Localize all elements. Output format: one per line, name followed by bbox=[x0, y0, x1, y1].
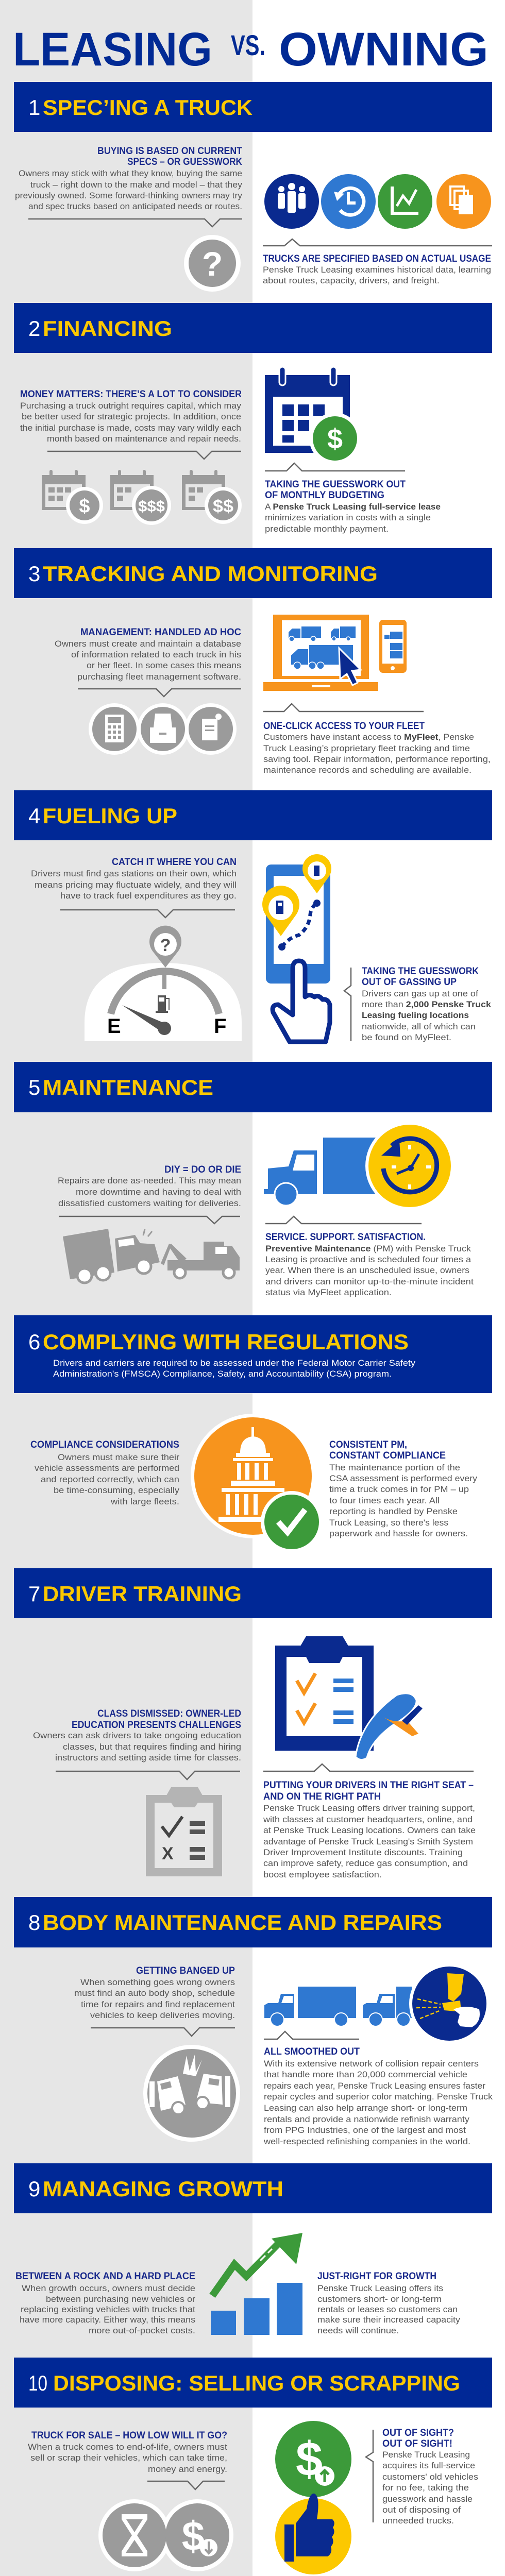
section 4: fueling up bbox=[14, 790, 492, 1042]
leasing text: right seat right path: advantage of Penske Truck Leasing's Smith System bbox=[263, 1837, 473, 1846]
icon: fuel gauge: F bbox=[214, 1015, 226, 1038]
leasing text: service support satisfaction bbox=[265, 1232, 474, 1297]
owning text: ad hoc management: Owners must create and maintain a database bbox=[55, 639, 241, 649]
leasing text: actual usage: about routes, capacity, drivers, and freight. bbox=[263, 276, 440, 285]
owning text: getting banged up: When something goes wrong owners bbox=[80, 1977, 235, 1987]
owning text: truck for sale: sell or scrap their vehicles, which can take time, bbox=[30, 2453, 227, 2463]
leasing text: all smoothed out: Leasing can also help arrange short- or long-term bbox=[264, 2103, 467, 2113]
icon: gray clipboard with check and x: X bbox=[162, 1844, 174, 1863]
leasing text: guesswork out of gassing up: more than 2,000 Penske Truck bbox=[362, 999, 492, 1009]
owning text: rock and hard place bbox=[15, 2271, 195, 2335]
leasing text: one-click access: Truck Leasing’s proprietary fleet tracking and time bbox=[263, 743, 470, 753]
bar 8: BODY MAINTENANCE AND REPAIRS bbox=[43, 1910, 442, 1935]
leasing text: all smoothed out: from PPG Industries, one of the largest and most bbox=[264, 2125, 466, 2135]
leasing text: monthly budgeting: minimizes variation in costs with a single bbox=[265, 513, 431, 522]
section 10: disposing bbox=[14, 2358, 492, 2574]
leasing text: service support satisfaction: Leasing is proactive and is scheduled four times a bbox=[265, 1255, 472, 1264]
leasing text: actual usage bbox=[263, 253, 491, 285]
owning text: DIY bbox=[58, 1164, 241, 1208]
owning text: DIY: DIY = DO OR DIE bbox=[164, 1164, 241, 1175]
leasing text: right seat right path: boost employee satisfaction. bbox=[263, 1870, 382, 1879]
owning text: rock and hard place: have more capacity. Either way, this means bbox=[20, 2315, 195, 2325]
icons: three gray calendars with coins: $ bbox=[79, 496, 90, 517]
owning text: money matters: MONEY MATTERS: THERE’S A LOT TO CONSIDER bbox=[20, 389, 242, 400]
leasing text: all smoothed out: well-respected refinishing companies in the world. bbox=[263, 2137, 470, 2146]
owning text: ad hoc management: or her fleet. In some cases this means bbox=[87, 660, 241, 670]
owning text: class dismissed: classes, but that requires finding and hiring bbox=[63, 1742, 241, 1752]
leasing text: one-click access: saving tool. Repair information, performance reporting, bbox=[263, 754, 491, 764]
leasing text: right seat right path: Penske Truck Leasing offers driver training support, bbox=[263, 1803, 475, 1813]
owning text: compliance considerations: and reported correctly, which can bbox=[41, 1475, 179, 1484]
owning text: catch it where you can: means pricing may fluctuate widely, and they will bbox=[35, 880, 237, 890]
owning text: compliance considerations: COMPLIANCE CONSIDERATIONS bbox=[30, 1439, 179, 1450]
leasing text: guesswork out of gassing up: Drivers can gas up at one of bbox=[362, 989, 478, 998]
owning text: rock and hard place: more out-of-pocket costs. bbox=[89, 2326, 195, 2335]
leasing text: monthly budgeting: OF MONTHLY BUDGETING bbox=[265, 490, 384, 501]
owning text: buying based on guesswork: SPECS – OR GUESSWORK bbox=[127, 157, 242, 167]
icons: calculator, file drawer, document bbox=[89, 703, 237, 755]
owning text: compliance considerations: with large fleets. bbox=[110, 1497, 179, 1506]
icon: fuel gauge: E bbox=[107, 1015, 121, 1038]
owning text: compliance considerations: be time-consuming, especially bbox=[54, 1485, 180, 1495]
bar 5 bbox=[14, 1062, 492, 1112]
bar 6 with intro bbox=[14, 1315, 492, 1393]
owning text: truck for sale: TRUCK FOR SALE – HOW LOW WILL IT GO? bbox=[31, 2430, 227, 2441]
leasing text: out of sight: for no fee, taking the bbox=[382, 2483, 469, 2493]
title bbox=[13, 23, 489, 76]
leasing text: just-right for growth: make sure their increased capacity bbox=[317, 2315, 461, 2325]
leasing text: monthly budgeting: A Penske Truck Leasing full-service lease bbox=[265, 502, 441, 512]
owning text: money matters bbox=[20, 389, 242, 444]
leasing text: service support satisfaction: Preventive Maintenance (PM) with Penske Truck bbox=[265, 1244, 472, 1253]
owning text: ad hoc management bbox=[55, 627, 241, 682]
bar 3: TRACKING AND MONITORING bbox=[43, 562, 378, 586]
leasing text: guesswork out of gassing up: TAKING THE GUESSWORK bbox=[362, 966, 479, 977]
leasing text: all smoothed out: that handle more than 20,000 commercial vehicle bbox=[264, 2070, 467, 2079]
title: LEASING bbox=[13, 23, 212, 76]
leasing text: out of sight: OUT OF SIGHT? bbox=[382, 2428, 454, 2438]
bar 10 bbox=[14, 2358, 492, 2408]
leasing text: guesswork out of gassing up: be found on MyFleet. bbox=[362, 1032, 451, 1042]
owning text: getting banged up: GETTING BANGED UP bbox=[136, 1965, 235, 1976]
leasing text: service support satisfaction: status via MyFleet application. bbox=[265, 1287, 392, 1297]
section 5: maintenance bbox=[14, 1062, 492, 1297]
icon: question circle bbox=[184, 235, 241, 292]
owning text: class dismissed: CLASS DISMISSED: OWNER-LED bbox=[97, 1708, 241, 1719]
leasing text: out of sight: acquires its full-service bbox=[382, 2461, 475, 2470]
bar 7: 7 bbox=[28, 1582, 40, 1606]
leasing text: actual usage: Penske Truck Leasing examines historical data, learning bbox=[263, 265, 491, 275]
icon: two blue trucks and paint sprayer bbox=[264, 1963, 490, 2044]
owning text: truck for sale: When a truck comes to end-of-life, owners must bbox=[28, 2442, 227, 2452]
leasing text: out of sight: customers' old vehicles bbox=[382, 2472, 478, 2482]
section 2: financing bbox=[14, 303, 492, 534]
leasing text: consistent PM: The maintenance portion of the bbox=[329, 1463, 460, 1472]
owning text: DIY: more downtime and having to deal with bbox=[76, 1187, 241, 1197]
leasing text: guesswork out of gassing up: nationwide, all of which can bbox=[362, 1022, 476, 1031]
owning text: buying based on guesswork bbox=[15, 146, 243, 211]
leasing text: guesswork out of gassing up bbox=[362, 966, 492, 1042]
icons: three gray calendars with coins: $$ bbox=[213, 497, 233, 516]
owning text: ad hoc management: of information related to each truck in his bbox=[71, 650, 241, 659]
bar 4 bbox=[14, 790, 492, 840]
leasing text: out of sight: Penske Truck Leasing bbox=[382, 2450, 470, 2460]
owning text: buying based on guesswork: and spec trucks based on anticipated needs or routes. bbox=[28, 201, 242, 211]
icon: phone with fuel pins and pointing hand bbox=[262, 854, 331, 1042]
leasing text: just-right for growth: rentals or leases so customers can bbox=[317, 2304, 458, 2314]
icon: navy clipboard with diploma bbox=[275, 1636, 423, 1760]
leasing text: all smoothed out: repair cycles and superior color matching. Penske Truck bbox=[264, 2092, 493, 2102]
bar 7 bbox=[14, 1568, 492, 1618]
title: VS. bbox=[231, 29, 265, 61]
icon: fuel gauge bbox=[85, 926, 242, 1041]
owning text: rock and hard place: When growth occurs, owners must decide bbox=[22, 2283, 195, 2293]
icon: fuel gauge: ? bbox=[160, 936, 171, 955]
owning text: compliance considerations bbox=[30, 1439, 180, 1506]
leasing text: service support satisfaction: year. When there is an unscheduled issue, owners bbox=[265, 1265, 469, 1275]
leasing text: right seat right path: AND ON THE RIGHT PATH bbox=[263, 1791, 381, 1802]
bar 3 bbox=[14, 548, 492, 598]
bar 2: FINANCING bbox=[43, 316, 172, 341]
leasing text: guesswork out of gassing up: Leasing fueling locations bbox=[362, 1010, 469, 1020]
owning text: compliance considerations: vehicle assessments are performed bbox=[35, 1463, 179, 1473]
leasing text: one-click access: maintenance records and scheduling are available. bbox=[263, 765, 472, 775]
bar 8: 8 bbox=[28, 1910, 40, 1935]
leasing text: consistent PM: reporting is handled by Penske bbox=[329, 1506, 458, 1516]
leasing text: all smoothed out: rentals and provide a nationwide refinish warranty bbox=[264, 2114, 470, 2124]
owning text: buying based on guesswork: BUYING IS BASED ON CURRENT bbox=[97, 146, 242, 157]
bar 6 with intro: 6 bbox=[28, 1330, 40, 1354]
icon: navy calendar with green coin bbox=[265, 367, 361, 464]
leasing text: just-right for growth: JUST-RIGHT FOR GROWTH bbox=[317, 2271, 436, 2282]
owning text: class dismissed: EDUCATION PRESENTS CHALLENGES bbox=[72, 1720, 241, 1731]
icons: rising dollar and thumbs up: $ bbox=[296, 2432, 323, 2486]
leasing text: right seat right path: can improve safety, reduce gas consumption, and bbox=[263, 1858, 468, 1868]
owning text: rock and hard place: replacing existing vehicles with trucks that bbox=[21, 2304, 195, 2314]
bar 9 bbox=[14, 2163, 492, 2213]
leasing text: consistent PM bbox=[329, 1439, 478, 1538]
bar 1 bbox=[14, 82, 492, 132]
leasing text: right seat right path: at Penske Truck Leasing locations. Owners can take bbox=[263, 1825, 476, 1835]
owning text: catch it where you can: Drivers must find gas stations on their own, which bbox=[31, 869, 237, 878]
owning text: buying based on guesswork: previously owned. Some forward-thinking owners may try bbox=[15, 191, 243, 200]
chart: growth bars with arrow bbox=[211, 2233, 302, 2335]
leasing text: one-click access bbox=[263, 721, 491, 775]
owning text: money matters: month based on maintenance and repair needs. bbox=[47, 434, 241, 444]
icons: hourglass and falling dollar bbox=[98, 2499, 233, 2571]
leasing text: consistent PM: CONSISTENT PM, bbox=[329, 1439, 407, 1450]
leasing text: just-right for growth: Penske Truck Leasing offers its bbox=[317, 2283, 443, 2293]
icon: question circle: ? bbox=[202, 245, 223, 283]
bar 5: MAINTENANCE bbox=[43, 1075, 213, 1099]
section 9: managing growth bbox=[14, 2163, 492, 2335]
leasing text: out of sight bbox=[382, 2428, 478, 2526]
owning text: rock and hard place: between purchasing new vehicles or bbox=[46, 2294, 195, 2304]
bar 8 bbox=[14, 1897, 492, 1947]
section 3: tracking and monitoring bbox=[14, 548, 492, 775]
leasing text: right seat right path bbox=[263, 1780, 476, 1879]
bar 6 with intro: Administration's (FMSCA) Compliance, Safety, and Accountability (CSA) program. bbox=[53, 1369, 392, 1379]
leasing text: consistent PM: time a truck comes in for PM – up bbox=[329, 1484, 469, 1494]
icons: three gray calendars with coins: $$$ bbox=[138, 498, 165, 515]
leasing text: service support satisfaction: SERVICE. SUPPORT. SATISFACTION. bbox=[265, 1232, 426, 1243]
owning text: truck for sale: money and energy. bbox=[148, 2464, 227, 2474]
leasing text: out of sight: OUT OF SIGHT! bbox=[382, 2438, 452, 2449]
leasing text: one-click access: ONE-CLICK ACCESS TO YOUR FLEET bbox=[263, 721, 425, 732]
bar 2: 2 bbox=[28, 316, 40, 341]
leasing text: consistent PM: CSA assessment is performed every bbox=[329, 1473, 478, 1483]
owning text: catch it where you can bbox=[31, 857, 237, 901]
bar 6 with intro: COMPLYING WITH REGULATIONS bbox=[43, 1330, 409, 1354]
owning text: getting banged up: time for repairs and find replacement bbox=[81, 1999, 235, 2009]
section 7: driver training bbox=[14, 1568, 492, 1879]
owning text: catch it where you can: have to track fuel expenditures as they go. bbox=[60, 891, 237, 901]
owning text: buying based on guesswork: Owners may stick with what they know, buying the same bbox=[19, 168, 242, 178]
owning text: money matters: the initial purchase is made, costs may vary wildly each bbox=[20, 423, 241, 433]
leasing text: guesswork out of gassing up: OUT OF GASSING UP bbox=[362, 977, 457, 988]
leasing text: consistent PM: Truck Leasing, so there's less bbox=[329, 1518, 448, 1528]
bar 7: DRIVER TRAINING bbox=[43, 1582, 242, 1606]
icon: laptop and phone with fleet bbox=[263, 615, 407, 691]
leasing text: monthly budgeting: TAKING THE GUESSWORK OUT bbox=[265, 479, 406, 490]
section 1: spec'ing a truck bbox=[14, 82, 492, 292]
leasing text: all smoothed out: With its extensive network of collision repair centers bbox=[264, 2059, 479, 2069]
leasing text: all smoothed out: repairs each year, Penske Truck Leasing ensures faster bbox=[264, 2081, 485, 2091]
bar 2 bbox=[14, 303, 492, 353]
icon: blue truck with maintenance clock bbox=[264, 1122, 454, 1210]
section 6: complying with regulations bbox=[14, 1315, 492, 1553]
owning text: rock and hard place: BETWEEN A ROCK AND A HARD PLACE bbox=[15, 2271, 195, 2282]
owning text: getting banged up: vehicles to keep deliveries moving. bbox=[90, 2010, 235, 2020]
leasing text: just-right for growth bbox=[317, 2271, 461, 2335]
bar 10: DISPOSING: SELLING OR SCRAPPING bbox=[53, 2371, 460, 2395]
icon: broken truck being towed bbox=[63, 1229, 240, 1283]
leasing text: consistent PM: to four times each year. All bbox=[329, 1496, 440, 1505]
icon: capitol building with check bbox=[191, 1414, 323, 1553]
bar 4: FUELING UP bbox=[43, 804, 177, 828]
leasing text: just-right for growth: needs will continue. bbox=[317, 2326, 399, 2335]
owning text: class dismissed: instructors and setting aside time for classes. bbox=[55, 1753, 241, 1762]
icons: three gray calendars with coins bbox=[42, 470, 242, 525]
bar 5: 5 bbox=[28, 1075, 40, 1099]
leasing text: all smoothed out: ALL SMOOTHED OUT bbox=[264, 2046, 360, 2057]
leasing text: out of sight: out of disposing of bbox=[382, 2505, 461, 2515]
icon: crash circle bbox=[143, 2045, 240, 2142]
owning text: class dismissed: Owners can ask drivers to take ongoing education bbox=[33, 1731, 241, 1740]
leasing text: just-right for growth: customers short- or long-term bbox=[317, 2294, 442, 2304]
bar 3: 3 bbox=[28, 562, 40, 586]
owning text: catch it where you can: CATCH IT WHERE YOU CAN bbox=[112, 857, 237, 868]
section 8: body maintenance and repairs bbox=[14, 1897, 493, 2146]
leasing text: service support satisfaction: and drivers can monitor up-to-the-minute incident bbox=[265, 1277, 474, 1286]
leasing text: right seat right path: Driver Improvement Institute discounts. Training bbox=[263, 1848, 463, 1857]
bar 4: 4 bbox=[28, 804, 40, 828]
bar 1: SPEC’ING A TRUCK bbox=[43, 95, 252, 120]
owning text: money matters: Purchasing a truck outright requires capital, which may bbox=[20, 401, 242, 411]
icon: gray clipboard with check and x bbox=[146, 1787, 222, 1876]
leasing text: out of sight: unneeded trucks. bbox=[382, 2516, 454, 2526]
owning text: getting banged up bbox=[74, 1965, 235, 2020]
owning text: truck for sale bbox=[28, 2430, 227, 2474]
icons: hourglass and falling dollar: $ bbox=[182, 2513, 205, 2559]
icons: rising dollar and thumbs up bbox=[275, 2421, 351, 2574]
owning text: ad hoc management: purchasing fleet management software. bbox=[77, 672, 241, 682]
bar 9: MANAGING GROWTH bbox=[43, 2177, 283, 2201]
owning text: DIY: Repairs are done as-needed. This may mean bbox=[58, 1176, 241, 1185]
title: OWNING bbox=[279, 23, 489, 76]
owning text: class dismissed bbox=[33, 1708, 241, 1762]
owning text: buying based on guesswork: truck – right down to the make and model – that they bbox=[30, 180, 243, 190]
bar 1: 1 bbox=[28, 95, 40, 120]
icons: four data circles bbox=[264, 174, 491, 229]
leasing text: consistent PM: paperwork and hassle for owners. bbox=[329, 1529, 468, 1538]
leasing text: right seat right path: PUTTING YOUR DRIVERS IN THE RIGHT SEAT – bbox=[263, 1780, 474, 1791]
owning text: ad hoc management: MANAGEMENT: HANDLED AD HOC bbox=[80, 627, 241, 638]
bar 6 with intro: Drivers and carriers are required to be assessed under the Federal Motor Carrier Safety bbox=[53, 1358, 416, 1368]
bar 9: 9 bbox=[28, 2177, 40, 2201]
leasing text: out of sight: guesswork and hassle bbox=[382, 2494, 473, 2504]
bar 10: 10 bbox=[28, 2371, 47, 2395]
leasing text: all smoothed out bbox=[263, 2046, 493, 2146]
owning text: compliance considerations: Owners must make sure their bbox=[58, 1452, 179, 1462]
leasing text: one-click access: Customers have instant access to MyFleet, Penske bbox=[263, 732, 474, 742]
leasing text: consistent PM: CONSTANT COMPLIANCE bbox=[329, 1450, 446, 1461]
owning text: DIY: dissatisfied customers waiting for deliveries. bbox=[58, 1198, 241, 1208]
icon: navy calendar with green coin: $ bbox=[327, 423, 343, 454]
leasing text: monthly budgeting: predictable monthly payment. bbox=[265, 524, 389, 534]
owning text: money matters: be better used for strategic projects. In addition, once bbox=[22, 412, 241, 421]
owning text: getting banged up: must find an auto body shop, schedule bbox=[74, 1988, 235, 1998]
leasing text: monthly budgeting bbox=[265, 479, 441, 534]
leasing text: right seat right path: with classes at customer headquarters, online, and bbox=[263, 1815, 473, 1824]
